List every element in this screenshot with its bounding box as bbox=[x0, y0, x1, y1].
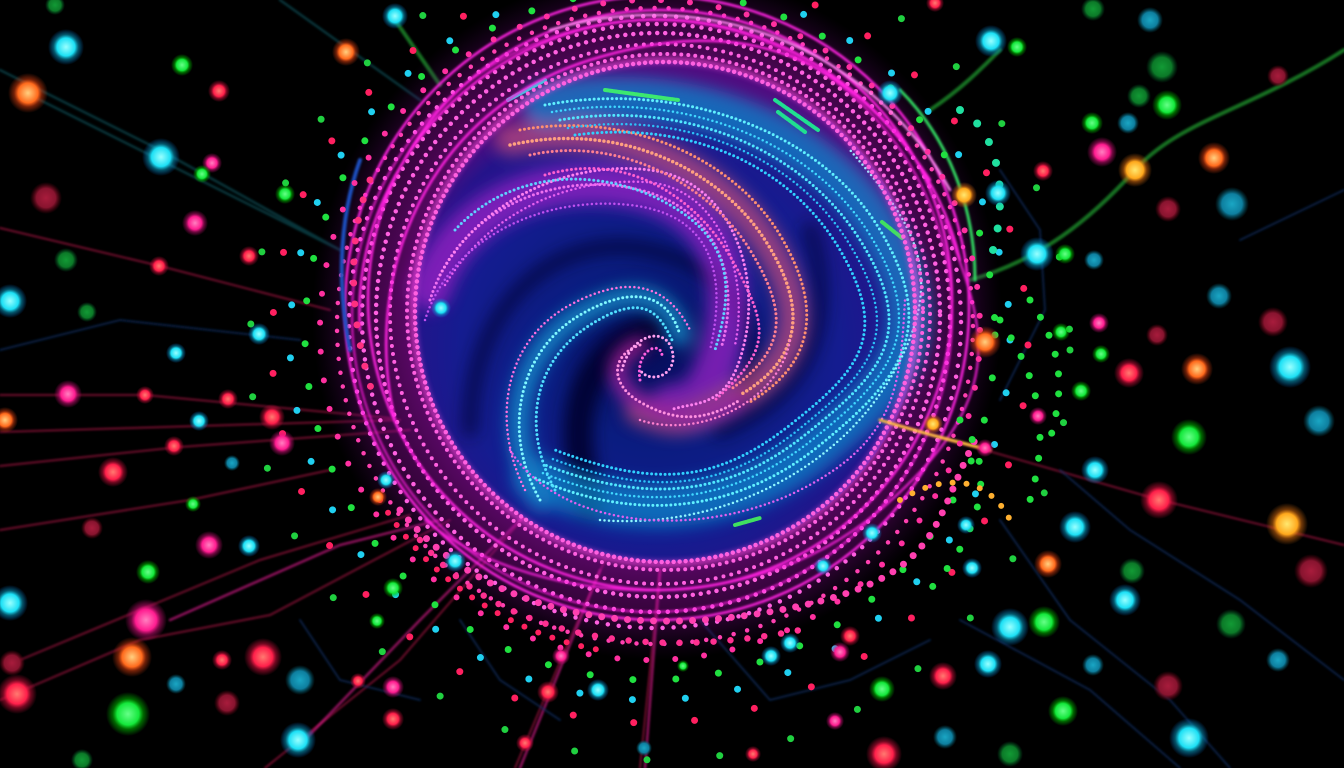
outer magenta haze bbox=[312, 0, 1002, 660]
blue spiral disc bbox=[416, 62, 920, 562]
soft glow arms bbox=[430, 99, 909, 505]
spiral arms bbox=[425, 80, 921, 525]
dark gaps in spiral bbox=[470, 230, 820, 500]
green and cyan highlights bbox=[508, 80, 902, 525]
magenta particle rings bbox=[337, 0, 990, 644]
scattered particles bbox=[250, 0, 1070, 760]
dotted texture arms bbox=[425, 99, 921, 521]
